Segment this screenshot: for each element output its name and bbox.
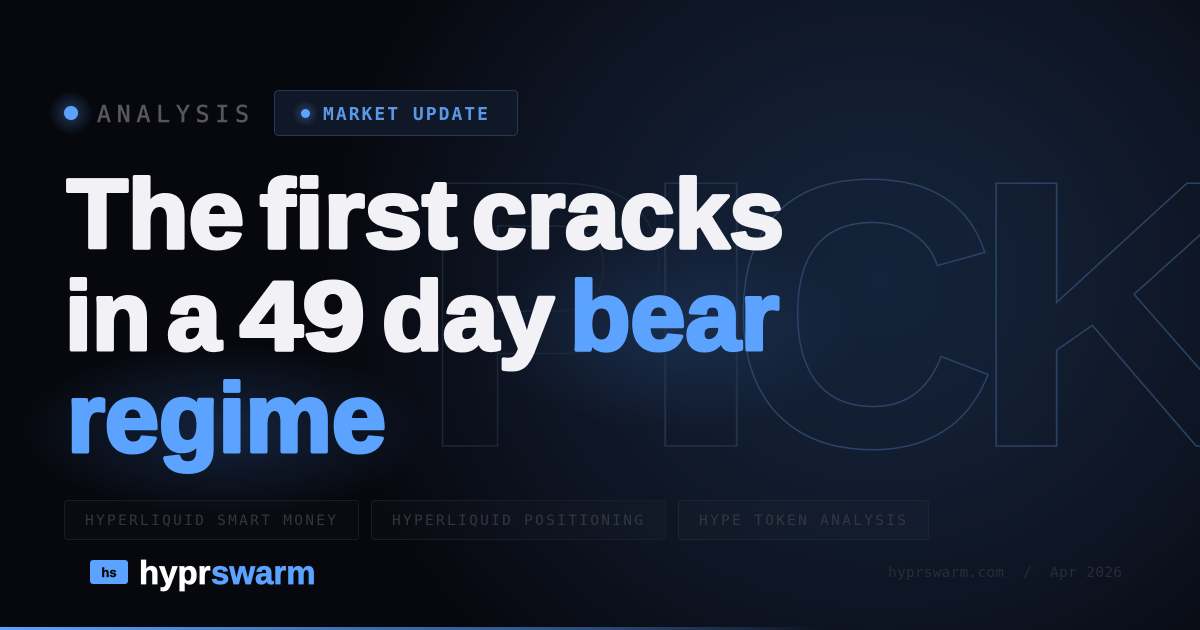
watermark word: PICK: I — [632, 100, 770, 527]
topic tags — [64, 500, 928, 540]
bottom accent bar — [0, 627, 820, 630]
glow behind regime — [20, 345, 430, 515]
footer: site and date — [888, 565, 1122, 581]
headline line 2: a — [167, 262, 222, 370]
logo — [90, 554, 316, 591]
tag: hyperliquid smart money: HYPERLIQUID SMART MONEY — [85, 513, 336, 529]
logo badge: hs — [101, 565, 117, 580]
headline line 2: 49 — [240, 262, 365, 370]
headline line 1: cracks — [472, 160, 784, 268]
analysis label: ANALYSIS — [97, 102, 249, 128]
tag: hyperliquid positioning: HYPERLIQUID POSITIONING — [392, 513, 643, 529]
tag: hype token analysis: HYPE TOKEN ANALYSIS — [699, 513, 906, 529]
tag: hype token analysis — [678, 500, 928, 540]
eyebrow: analysis — [49, 91, 249, 135]
watermark word: PICK — [417, 100, 1200, 528]
separator: / — [1023, 565, 1032, 581]
headline line 1: The — [67, 160, 244, 268]
badge label: MARKET UPDATE — [323, 104, 488, 125]
icon: analysis dot — [49, 91, 93, 135]
headline line 2: day — [382, 262, 554, 370]
headline line 2: in — [65, 262, 151, 370]
headline line 2 — [65, 262, 554, 370]
headline line 1: first — [260, 160, 457, 268]
badge: market update — [274, 90, 518, 136]
logo wordmark: hypr — [139, 554, 211, 591]
watermark word: PICK: C — [728, 102, 998, 528]
tag: hyperliquid smart money — [64, 500, 358, 540]
icon: badge dot — [292, 100, 318, 126]
highlighted word: bear: bear — [570, 262, 779, 370]
headline line 1 — [67, 160, 784, 268]
logo wordmark: swarm — [211, 554, 316, 591]
logo badge — [90, 560, 128, 584]
tag: hyperliquid positioning — [372, 500, 666, 540]
highlighted word: regime: regime — [67, 364, 386, 472]
date: Apr 2026 — [1050, 565, 1122, 581]
site url: hyprswarm.com — [888, 565, 1004, 581]
headline — [65, 160, 784, 472]
watermark word: PICK: P — [417, 100, 672, 527]
